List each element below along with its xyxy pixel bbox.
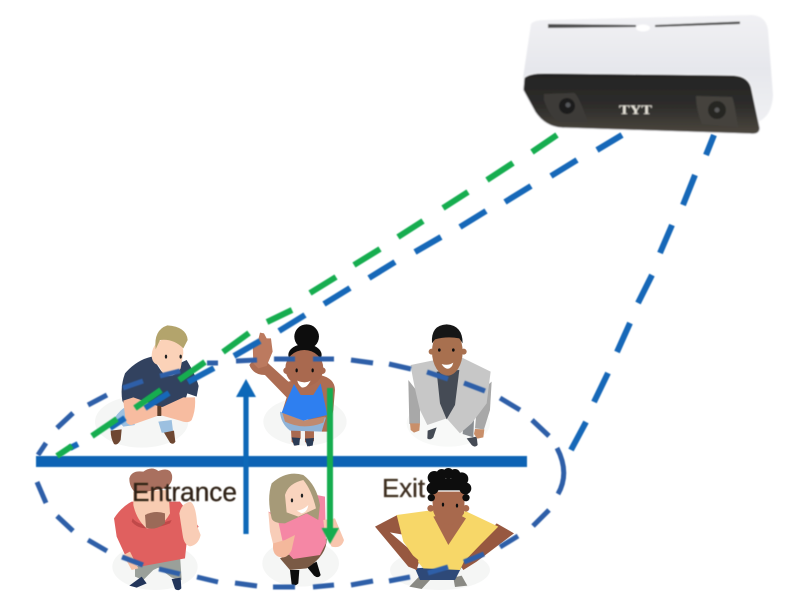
exit arrow bbox=[322, 388, 339, 544]
label: entrance: Entrance bbox=[132, 479, 237, 507]
person: man in navy shirt bbox=[95, 325, 199, 448]
blue sight line: right edge bbox=[571, 135, 714, 450]
dashed coverage ellipse bbox=[37, 359, 564, 587]
icon: TYT overhead camera: TYT bbox=[619, 102, 652, 117]
person: woman in pink shirt bbox=[262, 474, 344, 587]
icon: TYT overhead camera bbox=[523, 15, 773, 134]
green sight line bbox=[57, 135, 557, 456]
label: exit: Exit bbox=[382, 475, 425, 503]
entrance / exit divider line bbox=[36, 456, 527, 467]
person: bearded man in red shirt bbox=[112, 468, 201, 590]
person: woman in blue top bbox=[249, 324, 347, 447]
entrance arrow bbox=[236, 379, 256, 534]
blue sight line: left edge bbox=[70, 135, 622, 448]
person: man in yellow shirt bbox=[375, 468, 514, 590]
person: man in grey suit bbox=[407, 324, 492, 447]
